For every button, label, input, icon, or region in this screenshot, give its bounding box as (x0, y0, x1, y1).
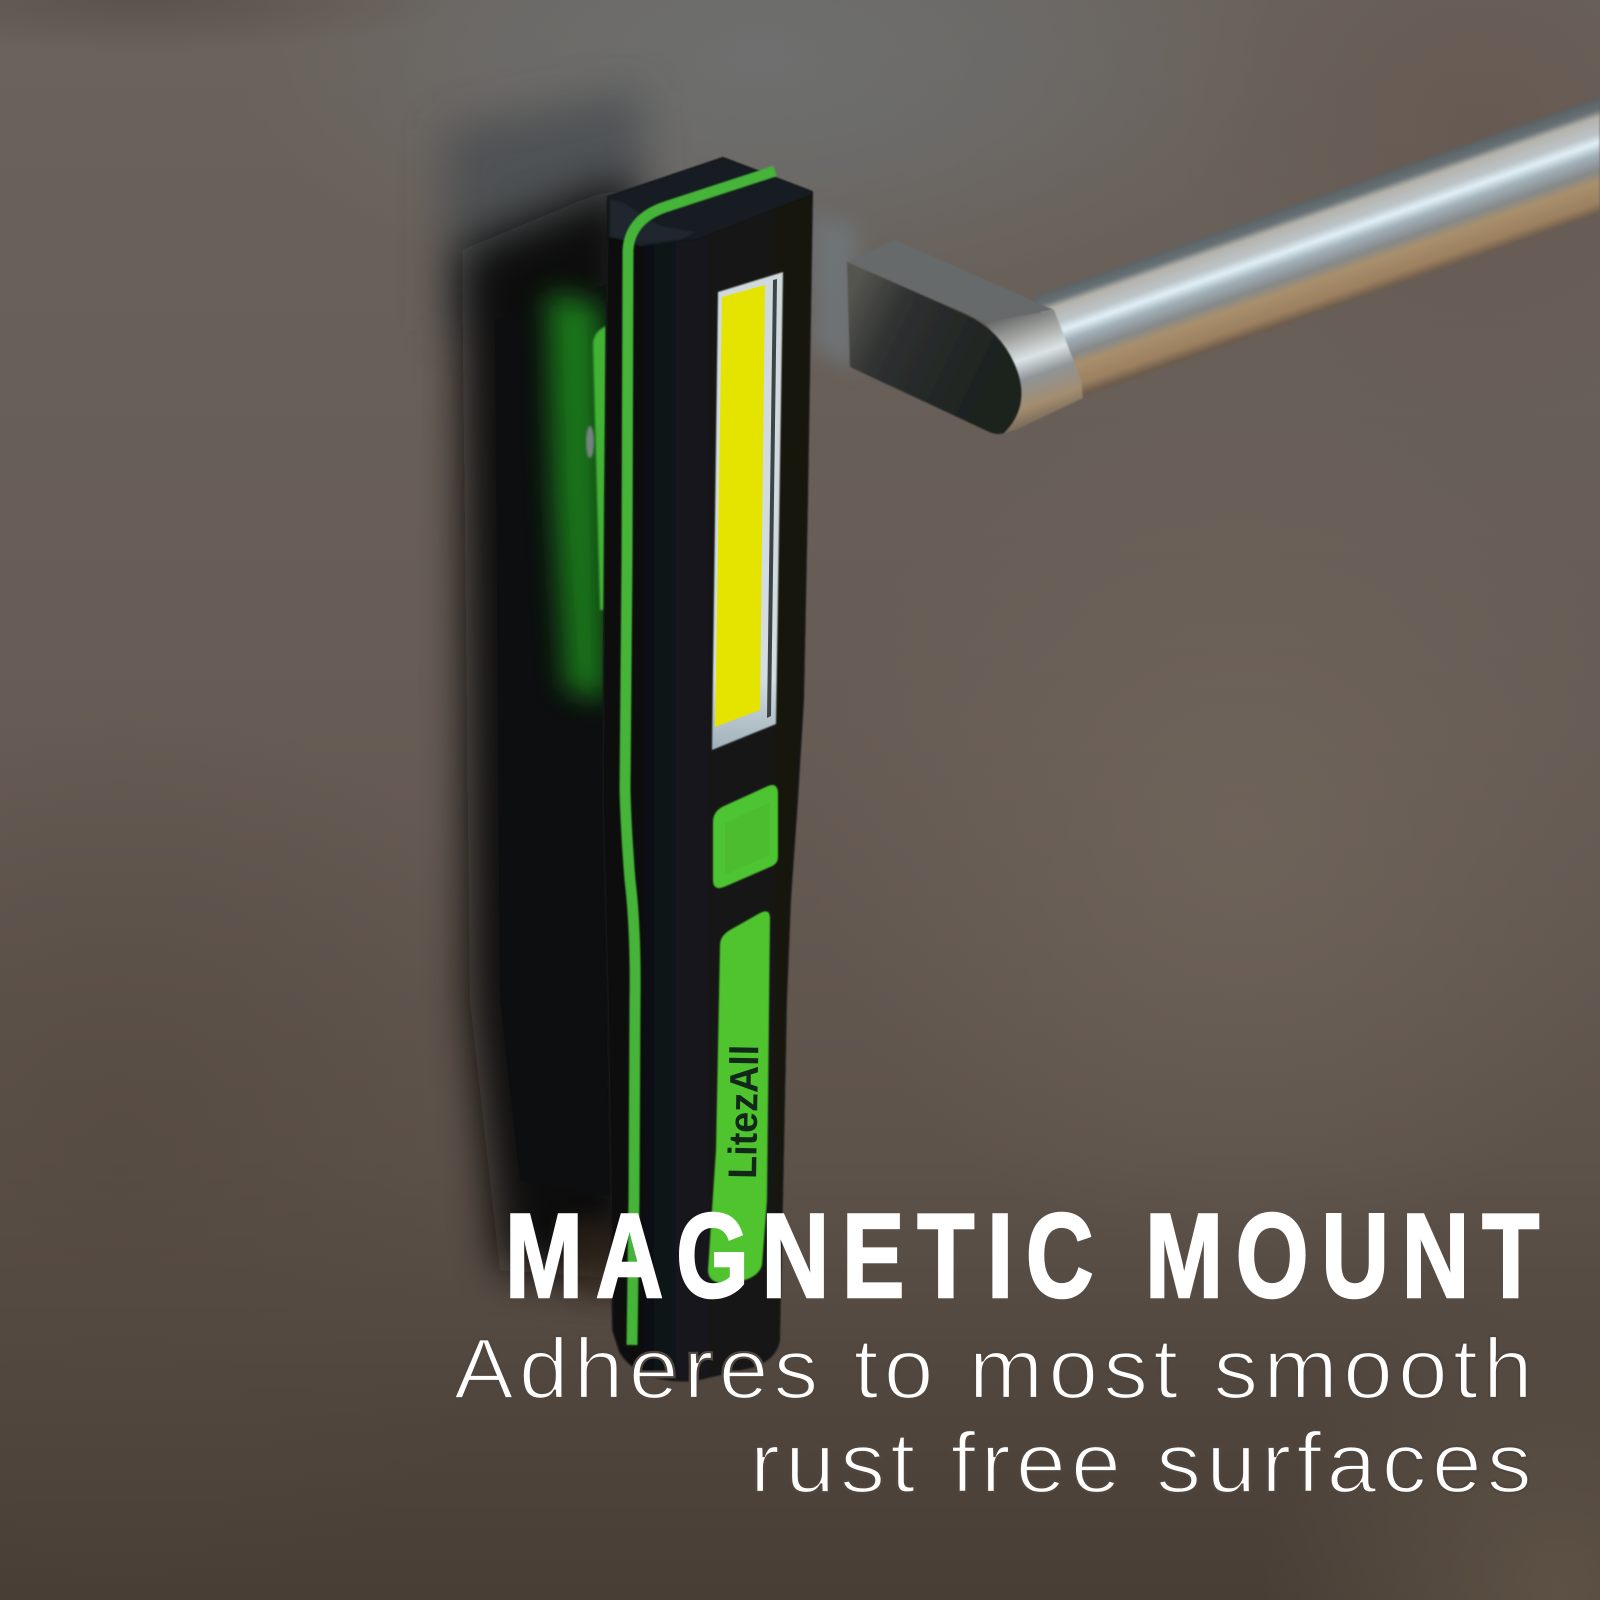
collar (985, 310, 1083, 433)
bracket top face (847, 240, 1054, 322)
yellow COB LED (715, 285, 765, 727)
top face (610, 160, 810, 240)
subtitle (454, 1322, 1538, 1511)
subtitle line 2: rust free surfaces (750, 1416, 1537, 1511)
wall shadow of the torch (445, 90, 858, 1300)
bar tube (1034, 97, 1600, 397)
towel bar handle (847, 97, 1600, 434)
subtitle line 1: Adheres to most smooth (454, 1322, 1538, 1417)
magnet clip (586, 326, 606, 610)
brand logo: LitezAll (721, 1044, 767, 1179)
bracket end face (847, 262, 1021, 434)
power button (713, 785, 778, 888)
light lens surround (712, 272, 783, 750)
magnet green glow behind torch (548, 292, 606, 700)
torch body (603, 158, 812, 1380)
green grip bar (708, 911, 770, 1283)
lens inner lines (767, 279, 777, 718)
green stripe (625, 171, 775, 1345)
LED torch (603, 158, 812, 1380)
title: MAGNETIC MOUNT (505, 1189, 1539, 1323)
